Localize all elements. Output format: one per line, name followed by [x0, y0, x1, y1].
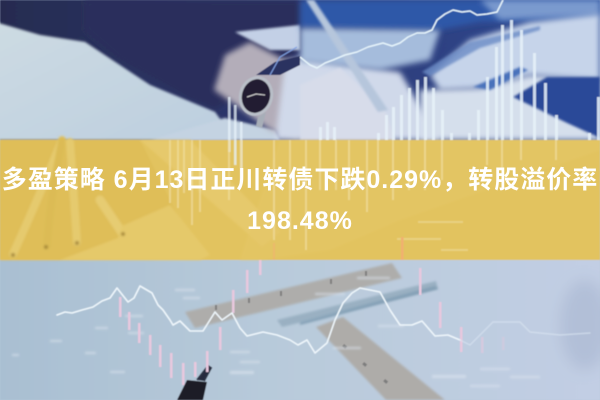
paper on desk — [0, 22, 235, 140]
faint caption marks — [12, 277, 540, 387]
car key — [177, 366, 211, 400]
pen — [306, 0, 388, 112]
band photo shadows — [0, 140, 600, 260]
right hand — [430, 14, 600, 90]
panel: upper photo — [0, 0, 600, 140]
chart: bar series over band — [169, 140, 557, 250]
title: 198.48% — [247, 207, 353, 235]
sheet behind wrist — [235, 25, 300, 50]
lower left hand — [300, 68, 395, 140]
ruler 2 — [277, 281, 438, 327]
dark sleeve — [85, 0, 300, 110]
title — [2, 166, 598, 235]
watch — [234, 56, 300, 128]
chart: pink candle bars — [119, 237, 504, 385]
ruler 3 — [316, 317, 445, 400]
rolled tubes — [13, 140, 123, 254]
ruler 1 — [185, 263, 402, 328]
chart: upper line — [270, 0, 503, 75]
upper right screen — [300, 0, 600, 30]
title: 多盈策略 6月13日正川转债下跌0.29%，转股溢价率 — [2, 166, 598, 194]
chart: lower line — [57, 286, 590, 353]
arm and hand — [214, 42, 300, 140]
panel: lower photo — [0, 260, 600, 400]
ruler markings — [215, 271, 388, 384]
band text marks — [397, 221, 468, 251]
chart: upper bar series — [228, 20, 600, 182]
panel: yellow title band — [0, 140, 600, 260]
dark tablet — [513, 77, 600, 138]
